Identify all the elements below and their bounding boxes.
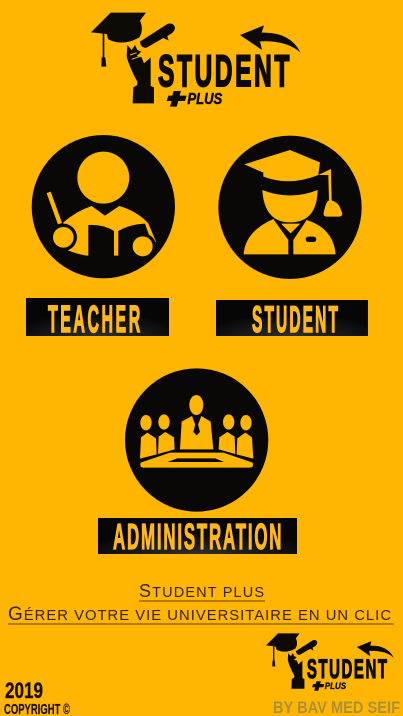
label: teacher banner (26, 298, 169, 341)
leader (180, 395, 213, 449)
icon: student circle (218, 136, 362, 279)
small arrow (357, 641, 394, 658)
teacher head (77, 152, 129, 204)
tassel (318, 169, 342, 217)
mortarboard (244, 150, 320, 181)
teacher body (63, 206, 156, 256)
logo: top Student Plus (91, 13, 301, 108)
badge (306, 237, 316, 242)
left members (140, 414, 175, 459)
logo wordmark: STUDENT (158, 45, 292, 96)
icon: administration circle (125, 368, 268, 512)
right members (219, 414, 253, 459)
small wordmark: STUDENT (307, 653, 389, 684)
icon: teacher circle (32, 135, 175, 278)
left hand (50, 224, 77, 251)
copyright year: 2019 (5, 678, 43, 703)
tie (193, 419, 200, 435)
label: administration banner: ADMINISTRATION (113, 517, 283, 557)
pointer stick (49, 192, 60, 224)
tagline: subtitle: GÉRER VOTRE VIE UNIVERSITAIRE EN UN CLIC (8, 604, 391, 625)
logo subtitle: PLUS (187, 91, 223, 108)
logo: bottom Student Plus (266, 633, 394, 691)
right hand (129, 233, 156, 260)
tagline: title: STUDENT PLUS (139, 581, 264, 601)
label: student banner (216, 299, 368, 341)
label: teacher banner: TEACHER (48, 299, 143, 341)
icon: hand holding (127, 45, 154, 103)
icon: return arrow (240, 25, 301, 53)
icon: graduation cap (91, 13, 146, 67)
small plus sign (312, 681, 324, 691)
small diploma (296, 640, 317, 655)
student body (244, 219, 336, 254)
label: student banner: STUDENT (252, 299, 340, 341)
table (140, 453, 253, 468)
small hand (288, 653, 304, 689)
logo plus sign (167, 91, 187, 107)
icon: diploma (140, 23, 175, 48)
open book (88, 224, 151, 258)
small subtitle: PLUS (325, 681, 347, 691)
small graduation cap (266, 633, 300, 666)
student face (262, 190, 318, 222)
